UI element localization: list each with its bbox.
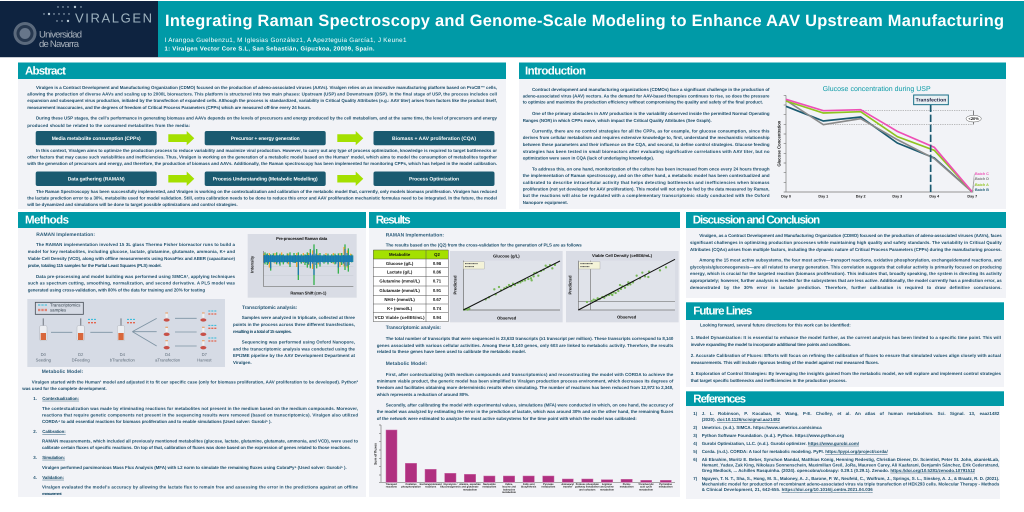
legend: transcriptomics samples (35, 302, 83, 314)
flow diagram: workflow (36, 172, 494, 186)
heading: future lines: Future Lines (693, 306, 752, 318)
text: abstract paragraphs: other factors that may cause such variabilities and inefficiencies. Thus, Viralgen is working on the generation of a metabolic model based on the Human¹ model, which aims to model the consumption of metabolites together (27, 154, 497, 160)
chart: pre-processed raman data: Pre-processed Raman data (276, 236, 328, 241)
panel: abstract (18, 62, 506, 209)
text: transcriptomic analysis: EPI2ME pipeline by the AAV Development Department at (233, 353, 356, 358)
text: metabolic model: Viralgen started with the Human¹ model and adjusted it to fit our specific case (only for biomass proliferation, AAV proliferation to be developed). Python³ (32, 380, 359, 384)
text: discussion paragraphs: glycolysis/gluconeogenesis—are all related to energy generation. This correlation suggests that cellular activity is primarily focused on producing (690, 264, 1002, 270)
text: raman implementation (28, 232, 236, 292)
table: PLS Q2 by metabolite (373, 250, 448, 322)
text: abstract paragraphs: measurement inaccuracies, and the degrees of freedom of Critical Process Parameters (CPPs) which are measured off-line every 24 hours. (27, 105, 311, 110)
text: metabolic model: Viralgen evaluated the model's accuracy by allowing the lactate flux to remain free and assessing the error in the predictions against an offline (42, 484, 359, 490)
panel: discussion and conclusion (686, 212, 1006, 298)
bar labels: and glutamate (462, 485, 478, 488)
text: abstract paragraphs: allowing the production of diverse AAVs and scaling up to 2000L bioreactors. This platform is structured into two main phases: Upstream (USP) and Downstream (DSP). In the final stage of USP, the process includes cell (27, 92, 497, 96)
bar labels: phosphorylation (401, 485, 421, 488)
text: raman implementation: generated using cross-validation, with 80% of the data for training and 20% for testing (28, 288, 205, 292)
text: metabolic model: 1. (33, 396, 37, 401)
panel: introduction (519, 62, 1006, 209)
text: reference list: Umetrics. (n.d.). SIMCA. https://www.umetrics.com/simca (702, 425, 822, 430)
text: reference list: Gurobi Optimization, LLC. (n.d.). Gurobi optimizer. https://www.gurobi.com/ (702, 441, 860, 446)
text: metabolic model: Metabolic Model: (42, 369, 84, 375)
text: reference list: Hemant_Yadav, Zak King, Nikolaus Sonnenschein, Maximilian Greil, JoRa, Maureen Carey, Ali Kaafarani, Benjamín Sánchez, Erik Cederstrand, (702, 462, 999, 468)
legend: transcriptomics samples: samples (50, 308, 66, 313)
text: metabolic model: reactions that require genetic components not present in the sequencing results were removed (based on transcriptomics). Viralgen also utilized (42, 412, 358, 418)
text: raman results intro: RAMAN Implementation: (386, 232, 444, 238)
authors and affiliation: 1: Viralgen Vector Core S.L, San Sebastián, Gipuzkoa, 20009, Spain. (164, 46, 375, 53)
table: PLS Q2 by metabolite: 0.67 (433, 297, 442, 302)
text: introduction paragraphs: derives from cellular metabolism and requires extensive knowledge to, first, understand the mechanistic relationship (523, 135, 770, 140)
bar labels: Pyruvate (543, 483, 554, 486)
heading: references: References (693, 394, 746, 406)
table: PLS Q2 by metabolite: Lactate (g/L) (387, 270, 413, 274)
text: reference list: Greg Medlock, ... Achilles Rasquinha. (2024). opencobra/cobrapy: 0.29.1 (0.29.1). Zenodo. https://doi.org/10.5281/zenodo.10791512 (702, 468, 976, 473)
text: introduction paragraphs: Nanopore equipment. (523, 200, 568, 205)
legend: batches (972, 172, 989, 192)
logo: Universidad de Navarra: de Navarra (39, 39, 80, 50)
text: metabolic model: 4. (33, 475, 37, 480)
text: reference list: 6) (693, 457, 698, 462)
labels: process days: D0 (41, 352, 46, 357)
variability callout: <20% (968, 116, 979, 121)
arrows: process steps (51, 318, 197, 346)
text: future directions: Looking forward, several future directions for this work can be identified: (700, 322, 851, 328)
text: metabolic model: CORDA⁴ to add essential reactions for biomass proliferation and to enable simulations (Used solver: Gurobi⁵ ). (42, 419, 272, 424)
text: transcriptomic analysis: and the transcriptomic analysis was conducted using the (233, 346, 356, 352)
text: metabolic model: Contextualization: (42, 396, 80, 401)
text: discussion paragraphs: significant challenges in optimizing production processes while maintaining high quality and safety standards. The variability in Critical Quality (690, 240, 1002, 245)
panel: future lines (686, 302, 1004, 387)
heading: discussion and conclusion: Discussion and Conclusion (693, 214, 820, 226)
axis labels: Day 7 (967, 195, 977, 199)
text: transcriptomic analysis: points in the process across three different transfections, (233, 322, 355, 327)
heading: results: Results (376, 214, 411, 226)
bar labels: Aminoacyl (561, 483, 574, 486)
text: future directions: that target specific bottlenecks and inefficiencies in the production process. (691, 378, 847, 383)
text: metabolic model: 2. (33, 429, 37, 434)
table: PLS Q2 by metabolite: NH4+ (mmol/L) (384, 297, 415, 302)
table: PLS Q2 by metabolite: K+ (mmol/L) (387, 306, 413, 311)
flow diagram: workflow: Process Optimization (409, 176, 459, 182)
text: metabolic model: Viralgen performed parsimonious Mass Flux Analysis (MFA) with L2 norm to simulate the remaining fluxes using CobraPy⁶ (Used solver: Gurobi⁵ ). (42, 465, 347, 470)
text: transcriptomic analysis: Samples were analyzed in triplicate, collected at three (242, 315, 356, 320)
text: discussion paragraphs: appropriately; however, further analysis is needed for the subsystems that are less active. Additionally, the model currently has a prediction error, as (690, 278, 1002, 283)
text: reference list: J. L. Robinson, P. Kocabas, H. Wang, P-E. Cholley, et al. An atlas of human metabolism. Sci. Signal. 13, eaaz1482 (702, 411, 1000, 416)
diagram: transcriptomics sampling workflow (27, 299, 225, 367)
text: results transcriptomics and metabolic model (376, 325, 674, 421)
transfection marker (914, 95, 948, 192)
bar chart: most active subsystems (374, 425, 675, 494)
flow diagram: metabolism (36, 131, 494, 145)
text: introduction paragraphs: proliferation (not yet developed for AAV proliferation). This model will not only be fed by the data measured by Raman, (523, 186, 770, 192)
text: abstract paragraphs: expansion and subsequent virus production, initiated by the transfection of expanded cells. Although the process is standardized, variability in Critical Quality Attributes (e.g.: AAV titer) arises from factors like the product itself, (27, 98, 497, 103)
authors and affiliation (164, 37, 407, 53)
text: future directions: 1. Model Dynamization: It is essential to enhance the model further, as the current analysis has been limited to a specific time point. This will (691, 335, 1001, 340)
text: abstract paragraphs: Viralgen is a Contract Development and Manufacturing Organization (CDMO) focused on the production of adeno-associated viruses (AAVs). Viralgen relies on an innovative manufacturing platform based on ProCB™ cells, (36, 85, 497, 90)
heading: abstract: Abstract (25, 66, 66, 78)
bar labels: and proline (600, 485, 614, 488)
logo: Universidad de Navarra (14, 22, 82, 50)
axis labels: Day 1 (818, 195, 828, 199)
text: introduction paragraphs: optimization were seen in CQA (lack of underlaying knowledge). (523, 156, 654, 160)
text: reference list: & Clinical Development, 21, 642-655. https://doi.org/10.1016/j.omtm.2021.04.036 (702, 487, 873, 492)
bar labels: metabolism (659, 485, 673, 488)
panel: methods (18, 212, 366, 497)
bar chart: most active subsystems: Sum of fluxes (374, 443, 378, 465)
text: raman implementation: RAMAN Implementation: (36, 232, 95, 238)
labels: process days: D7 (202, 352, 207, 357)
text: abstract paragraphs: In this context, Viralgen aims to optimize the production process to reduce variability and maximize viral production. However, to carry out any type of process optimization, knowledge is required to target bottlenecks or (36, 148, 497, 153)
text: introduction paragraphs: strategies has been tested in small bioreactors after evaluating significative correlations with AAV titer, but no (523, 149, 770, 154)
text: results transcriptomics and metabolic model: which represents a reduction of around 80%. (376, 392, 469, 397)
text: introduction paragraphs: One of the primary obstacles in AAV production is the variability observed inside the permitted Normal Operating (532, 111, 770, 116)
text: results transcriptomics and metabolic model: minimum viable product, the generic model has been simplified to Viralgen production process environment, which decreases its degrees of (377, 378, 674, 384)
text: metabolic model: The contextualization was made by eliminating reactions for metabolites not present in the medium based on the medium compounds. Moreover, (42, 406, 358, 411)
labels: process days: DFeeding (72, 358, 90, 363)
text: raman implementation: The RAMAN implementation involved 15 3L glass Thermo Fisher bioreactor runs to build a (36, 242, 236, 247)
text: introduction paragraphs: To address this, on one hand, monitorization of the culture has been increased from once every 24 hours through (532, 166, 770, 172)
bar labels: metabolism (502, 491, 516, 494)
bar labels: Pyrimidine (659, 483, 672, 486)
table: PLS Q2 by metabolite: VCD Viable (cellE6/mL) (375, 315, 425, 320)
text: raman implementation: model for key metabolites, including glucose, lactate, glutamine, glutamate, ammonia, K+ and (28, 249, 235, 254)
text: introduction paragraphs: adeno-associated virus (AAV) vectors. As the demand for AAV-based therapies continues to rise, so does the pressure (523, 94, 770, 98)
text: reference list: 4) (693, 441, 698, 446)
text: raman results intro (386, 232, 582, 248)
bar labels: metabolism (463, 488, 477, 491)
legend: batches: Batch C (975, 172, 989, 176)
bar labels: pathway metabolism (575, 485, 600, 488)
text: metabolic model: was used for the complete development. (21, 386, 107, 391)
text: transcriptomic analysis: Viralgen. (233, 360, 252, 365)
text: introduction paragraphs: Contract development and manufacturing organizations (CDMOs) face a significant challenge in the production of (532, 87, 770, 92)
text: discussion paragraphs: Viralgen, as a Contract Development and Manufacturing Organization (CDMO) focused on the production of adeno-associated viruses (AAVs), faces (699, 233, 1002, 238)
bar labels: leucine and (502, 485, 516, 488)
labels: process days: D2 (78, 352, 83, 357)
axis labels (776, 121, 977, 199)
text: reference list: 2) (693, 425, 698, 430)
table: PLS Q2 by metabolite: 0.94 (433, 315, 442, 320)
bar labels: Transport (386, 483, 397, 486)
axis labels: Day 4 (929, 195, 940, 199)
table: PLS Q2 by metabolite: Glucose (g/L) (386, 261, 414, 266)
line chart: glucose concentration (776, 85, 989, 199)
text: abstract paragraphs: The Raman Spectroscopy has been successfully implemented, and Viralgen is working on the contextualization and calibration of the metabolic model that, currently, only models biomass proliferation. Viralgen has reduced (36, 189, 497, 194)
table: PLS Q2 by metabolite: 0.71 (433, 279, 442, 284)
text: raman implementation: Viable Cell Density (VCD), along with offline measurements using NovaFlex and ABER (capacitance) (28, 256, 236, 261)
authors and affiliation: I Arangoa Guelbenzu1, M Iglesias González1, A Apezteguia García1, J Keune1 (164, 37, 407, 44)
bar labels: metabolism (600, 488, 614, 491)
axis labels: Day 2 (856, 195, 866, 199)
text: future directions: 3. Exploration of Control Strategies: By leveraging the insights gained from the metabolic model, we will explore and implement control strategies (691, 371, 1002, 376)
text: introduction paragraphs: between these parameters and their influence on the CQA, and second, to define control strategies. Glucose feeding (523, 142, 770, 147)
text: metabolic model: Calibration: (42, 429, 66, 434)
logo: Universidad de Navarra: Universidad (39, 30, 82, 40)
bar labels: Gluconeogenesis (440, 485, 461, 488)
legend: batches: Batch B (975, 188, 989, 192)
flow diagram: metabolism: Media metabolite consumption (CPPs) (52, 136, 141, 142)
text: discussion paragraphs (690, 233, 1002, 290)
scatter plot: glucose: Glucose (g/L) (493, 254, 520, 258)
text: introduction paragraphs: calibrated to describe intracellular activity that helps detecting bottlenecks and inefficiencies when biomass (523, 180, 770, 185)
text: abstract paragraphs: will be dynamized and simulations will be done to target possible optimizations and control strategies. (26, 202, 238, 207)
text: reference list: 3) (693, 433, 698, 438)
labels: process days: D4 (120, 352, 125, 357)
text: results transcriptomics and metabolic model: Transcriptomic analysis: (386, 325, 441, 331)
text: introduction paragraphs: but the reactions will also be regulated with a complementary transcriptomic study conducted with the Oxford (523, 193, 770, 198)
text: results transcriptomics and metabolic model: Secondly, after calibrating the model with experimental values, simulations (MFA) were conducted in which, on one hand, the accuracy of (386, 402, 674, 408)
scatter plot: viable cell density: Predicted (568, 276, 572, 294)
text: results transcriptomics and metabolic model: The total number of transcripts that were sequenced is 23,633 transcripts (≥1 transcript per million). These transcripts correspond to 8,140 (386, 336, 674, 341)
text: discussion paragraphs: Attributes (CQAs) arises from multiple factors, including the dynamic nature of Critical Process Parameters (CPPs) during the manufacturing process. (690, 247, 1002, 252)
text: results transcriptomics and metabolic model: of the network were estimated to analyze the most active subsystems for the time point with which the model was calibrated: (377, 416, 637, 421)
axis labels: Glucose Concentration (776, 121, 781, 167)
header banner (0, 1, 1024, 58)
scatter plot: viable cell density (566, 251, 679, 322)
text: reference list: 5) (693, 449, 698, 454)
labels: process days: D4 (165, 352, 170, 357)
text: reference list: 1) (693, 411, 698, 416)
text: reference list: Mechanistic model for production of recombinant adeno-associated virus via triple transfection of HEK293 cells. Molecular Therapy - Methods (702, 482, 1000, 486)
table: PLS Q2 by metabolite: Metabolite (389, 252, 411, 257)
text: raman implementation: Data pre-processing and model building was performed using SIMCA², applying techniques (36, 274, 236, 279)
text: transcriptomic analysis (233, 305, 356, 365)
axis labels: Day 3 (892, 195, 902, 199)
chart: pre-processed raman data: Raman Shift (cm-1) (290, 291, 326, 296)
text: reference list: 7) (693, 476, 698, 481)
scatter plot: viable cell density: Viable Cell Density (cellE6/mL) (592, 253, 652, 258)
heading: methods: Methods (25, 214, 69, 226)
table: PLS Q2 by metabolite: 0.74 (433, 306, 442, 311)
logo: Viralgen (43, 6, 152, 26)
text: metabolic model: calibrate certain fluxes of specific reactions. On top of that, calibration of fluxes was done based on the expression of genes related to those reactions. (42, 445, 351, 450)
bar labels: metabolism (482, 485, 496, 488)
bar labels: and cofactors (579, 488, 596, 491)
text: introduction paragraphs: the implementation of Raman spectroscopy, and on the other hand, a metabolic model has been contextualized and (523, 173, 770, 178)
bar labels: metabolism (541, 485, 555, 488)
bar labels: Valine, (505, 483, 513, 486)
text: raman results intro: The results based on the (Q2) from the cross-validation for the generation of PLS are as follows (386, 242, 582, 248)
text: metabolic model: measurement (42, 491, 62, 496)
bar labels: metabolism (639, 488, 653, 491)
bar labels: Nucleotide (483, 483, 496, 486)
text: introduction paragraphs (523, 87, 770, 205)
text: reference list: Corda. (n.d.). CORDA: A tool for metabolic modeling. PyPI. https://pypi.org/project/corda/ (702, 449, 888, 454)
variability callout (966, 111, 981, 124)
text: metabolic model: Validation: (42, 475, 65, 480)
text: metabolic model: RAMAN measurements, which included all previously mentioned metabolites (glucose, lactate, glutamine, glutamate, ammonia, and VCD), were used to (42, 438, 358, 444)
text: introduction paragraphs: Currently, there are no control strategies for all the CPPs, as for example, for glucose consumption, since this (532, 128, 770, 134)
text: introduction paragraphs: Ranges (NOR) in which CPPs move, which impact the Critical Quality Attributes (See Graph). (523, 118, 712, 123)
bar labels: Glycolysis / (443, 483, 458, 486)
bar labels (386, 483, 673, 494)
text: abstract paragraphs: produced should be related to the consumed metabolites from the media: (27, 123, 191, 128)
bar labels: metabolism (620, 485, 634, 488)
panel: references (686, 391, 1004, 499)
bar labels: acid cycle (640, 485, 652, 488)
table: PLS Q2 by metabolite: Q2 (434, 252, 440, 257)
table: PLS Q2 by metabolite: Glutamine (mmol/L) (379, 279, 420, 284)
labels: process days: aTransfection (155, 358, 180, 363)
labels: process days: Seeding (36, 358, 51, 363)
text: abstract paragraphs: with the generation of precursors and energy, and therefore, the production of biomass and AAVs. Additionally, the Raman spectroscopy has been implemented for monitoring CPPs, which has helped in the model calibration. (26, 161, 497, 166)
text: raman implementation: probe, totaling 115 samples for the Partial Least Squares (PLS) model. (28, 263, 162, 268)
panel: results (369, 212, 680, 497)
icons: flasks (164, 312, 206, 349)
text: raman implementation: such as spectrum cutting, smoothing, normalization, and second derivative. A PLS model was (28, 280, 236, 286)
bar labels: Pentose phosphate (576, 483, 599, 486)
table: PLS Q2 by metabolite: 0.91 (433, 288, 442, 293)
chart title: Glucose concentration during USP (823, 85, 931, 93)
heading: introduction: Introduction (525, 66, 586, 78)
text: metabolic model (21, 369, 359, 496)
bar labels: Exchange/demand (420, 483, 442, 486)
text: discussion paragraphs: demonstrated by the 30% error in lactate prediction. Therefore, further calibration is required to draw definitive conclusions. (690, 285, 1002, 290)
labels: process days: Harvest (197, 358, 212, 363)
scatter plot: glucose: Predicted (453, 276, 457, 294)
chart: pre-processed raman data: Intensity (250, 256, 255, 273)
text: reference list (693, 411, 1000, 492)
logo: Viralgen: VIRALGEN (75, 10, 152, 26)
text: results transcriptomics and metabolic model: First, after contextualizing (with medium compounds and transcriptomics) and reconstructing the model with CORDA to achieve the (386, 372, 674, 377)
text: results transcriptomics and metabolic model: Metabolic Model: (386, 361, 428, 367)
axis labels: Day 0 (781, 195, 791, 199)
flow diagram: metabolism: Precursor + energy generation (231, 136, 300, 142)
text: future directions: involve expanding the model to incorporate additional time points and conditions. (691, 342, 851, 347)
text: abstract paragraphs: the lactate prediction error to a 30%, metabolite used for model validation. Still, extra calibration needs to be done to reduce this error and AAV proliferation mechanistic formulas need to be integrated. In the future, the model (27, 196, 497, 200)
text: discussion paragraphs: energy, which is crucial for the targeted reaction (biomass proliferation). This indicates that, broadly speaking, the system is directing its activity (690, 271, 1002, 276)
table: PLS Q2 by metabolite: 0.86 (433, 270, 442, 274)
text: results transcriptomics and metabolic model: freedom and facilitates obtaining more deterministic results when simulating. The number of reactions has been reduced from 12,972 to 2,348, (377, 385, 673, 390)
text: transcriptomic analysis: resulting in a total of 15 samples. (233, 329, 292, 334)
text: metabolic model: 3. (33, 455, 37, 460)
bar labels: isoleucine (503, 488, 515, 491)
text: abstract paragraphs (26, 85, 498, 207)
flow diagram: workflow: Process Understanding (Metabolic Modelling) (213, 176, 318, 182)
text: reference list: Python Software Foundation. (n.d.). Python. https://www.python.org (702, 433, 844, 438)
text: metabolic model: Simulation: (42, 455, 66, 460)
bar labels: Oxidative (405, 483, 417, 486)
bar labels: transfer (563, 485, 572, 488)
labels: process days (36, 352, 212, 363)
bar labels: Fatty acid (523, 483, 535, 486)
markers: sample dashes (88, 311, 216, 341)
table: PLS Q2 by metabolite: 0.98 (433, 261, 442, 266)
text: reference list: Ali Ebrahim, Moritz E. Beber, Synchon Mandal, Matthias König, Henning Redestig, Christian Diener, Dr. Scientist, Peter St. John, akaniekLab, (702, 457, 999, 462)
text: future directions: 2. Accurate Calibration of Fluxes: Efforts will focus on refining the calibration of fluxes to ensure that simulated values align closely with actual (691, 353, 1001, 358)
bar labels: Arginine (602, 483, 612, 486)
text: introduction paragraphs: to optimize and maximize the production efficiency without compromising the quality and safety of the final product. (523, 100, 763, 104)
text: transcriptomic analysis: Sequencing was performed using Oxford Nanopore, (242, 340, 355, 344)
text: results transcriptomics and metabolic model: genes associated with various cellular activities. Among these 8,140 genes, only 603 are linked to metabolic activity. Therefore, the results (377, 343, 674, 348)
text: future directions (691, 322, 1002, 383)
transfection marker: Transfection (916, 97, 946, 103)
text: results transcriptomics and metabolic model: the model was analyzed by estimating the error in the prediction of lactate, which was around 30% and on the other hand, the remaining fluxes (377, 409, 674, 414)
legend: transcriptomics samples: Transcriptomics (50, 303, 81, 308)
scatter plot: glucose: Observed (497, 316, 516, 320)
table: PLS Q2 by metabolite: Glutamate (mmol/L) (379, 288, 420, 293)
bar labels: Tricarboxylic (638, 483, 654, 486)
flow diagram: metabolism: Biomass + AAV proliferation (CQA) (392, 136, 476, 142)
bar labels: Purine (623, 483, 631, 486)
icons: bioreactors (40, 318, 125, 341)
title: Integrating Raman Spectroscopy and Genome-Scale Modeling to Enhance AAV Upstream Manufacturing (165, 12, 1004, 30)
chart: pre-processed raman data (248, 234, 357, 298)
flow diagram: workflow: Data gathering (RAMAN) (68, 176, 125, 182)
bar labels: reactions (386, 485, 397, 488)
labels: process days: bTransfection (110, 358, 135, 363)
text: discussion paragraphs: Among the 15 most active subsystems, the four most active—transport reactions, oxidative phosphorylation, exchange/demand reactions, and (699, 258, 1002, 262)
scatter plot: glucose (450, 251, 563, 322)
text: future directions: measurements. This will include rigorous testing of the model against real measured fluxes. (691, 360, 879, 365)
text: transcriptomic analysis: Transcriptomic analysis: (242, 305, 298, 311)
bar labels: biosynthesis (521, 485, 536, 488)
text: abstract paragraphs: During these USP stages, the cell's performance in generating biomass and AAVs depends on the levels of precursors and energy produced by the cell metabolism, and at the same time, the level of precursors and energy (36, 116, 498, 120)
text: reference list: Nguyen, T. N. T., Sha, S., Hong, M. S., Maloney, A. J., Barone, P. W., Neufeld, C., Wolfrum, J., Springs, S. L., Sinskey, A. J., & Braatz, R. D. (2021). (702, 476, 999, 481)
bar labels: Alanine, aspartate (459, 483, 481, 486)
text: reference list: (2020). doi:10.1126/scisignal.aaz1482 (702, 417, 781, 422)
text: results transcriptomics and metabolic model: related to these genes have been used to calibrate the metabolic model. (377, 349, 526, 354)
scatter plot: viable cell density: Observed (617, 315, 636, 319)
legend: batches: Batch D (975, 177, 989, 181)
bar labels: reactions (425, 485, 436, 488)
legend: batches: Batch A (975, 183, 989, 187)
